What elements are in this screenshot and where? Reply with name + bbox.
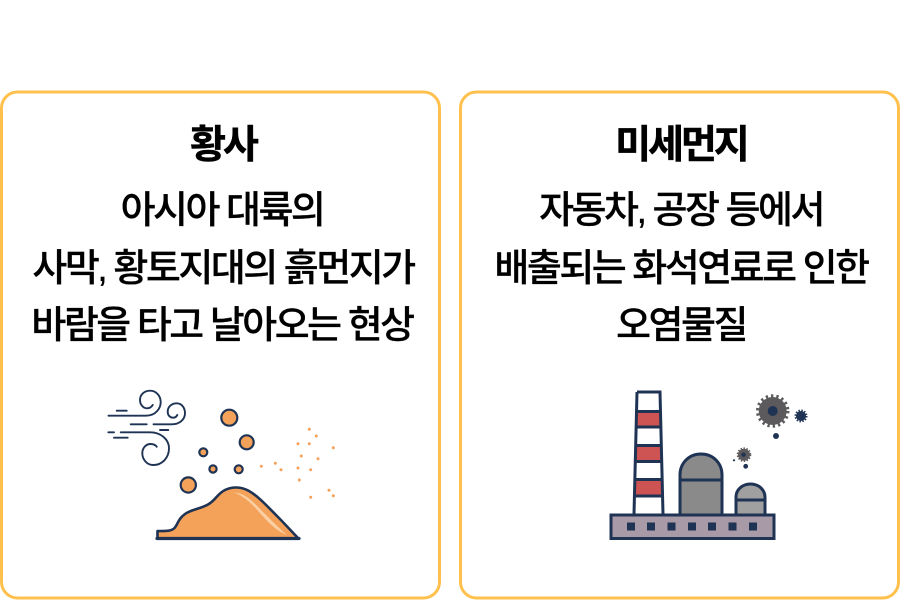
icon: large tank <box>680 454 722 514</box>
text block: 황사 description: 사막, 황토지대의 흙먼지가 <box>32 248 415 290</box>
heading: 미세먼지: 미세먼지 <box>615 124 747 167</box>
text block: 황사 description: 아시아 대륙의 <box>121 190 323 232</box>
icon: factory base <box>611 515 774 538</box>
text block: 미세먼지 description: 오염물질 <box>616 305 746 347</box>
text block: 황사 description <box>31 190 415 347</box>
panel: 미세먼지 <box>460 92 898 598</box>
text block: 미세먼지 description <box>494 190 869 347</box>
icon: wind <box>108 391 185 465</box>
icon: fine dust particles <box>733 396 806 469</box>
icon: small tank <box>736 484 765 514</box>
icon: sand pile <box>157 487 299 538</box>
text block: 미세먼지 description: 자동차, 공장 등에서 <box>539 190 823 232</box>
heading: 황사: 황사 <box>190 124 259 167</box>
icon: chimney <box>634 392 663 514</box>
text block: 미세먼지 description: 배출되는 화석연료로 인한 <box>494 248 869 290</box>
icon: fine dust dots <box>260 428 335 499</box>
icon: sand particles <box>181 410 254 493</box>
text block: 황사 description: 바람을 타고 날아오는 현상 <box>31 305 414 347</box>
panel: 황사 <box>2 92 440 598</box>
